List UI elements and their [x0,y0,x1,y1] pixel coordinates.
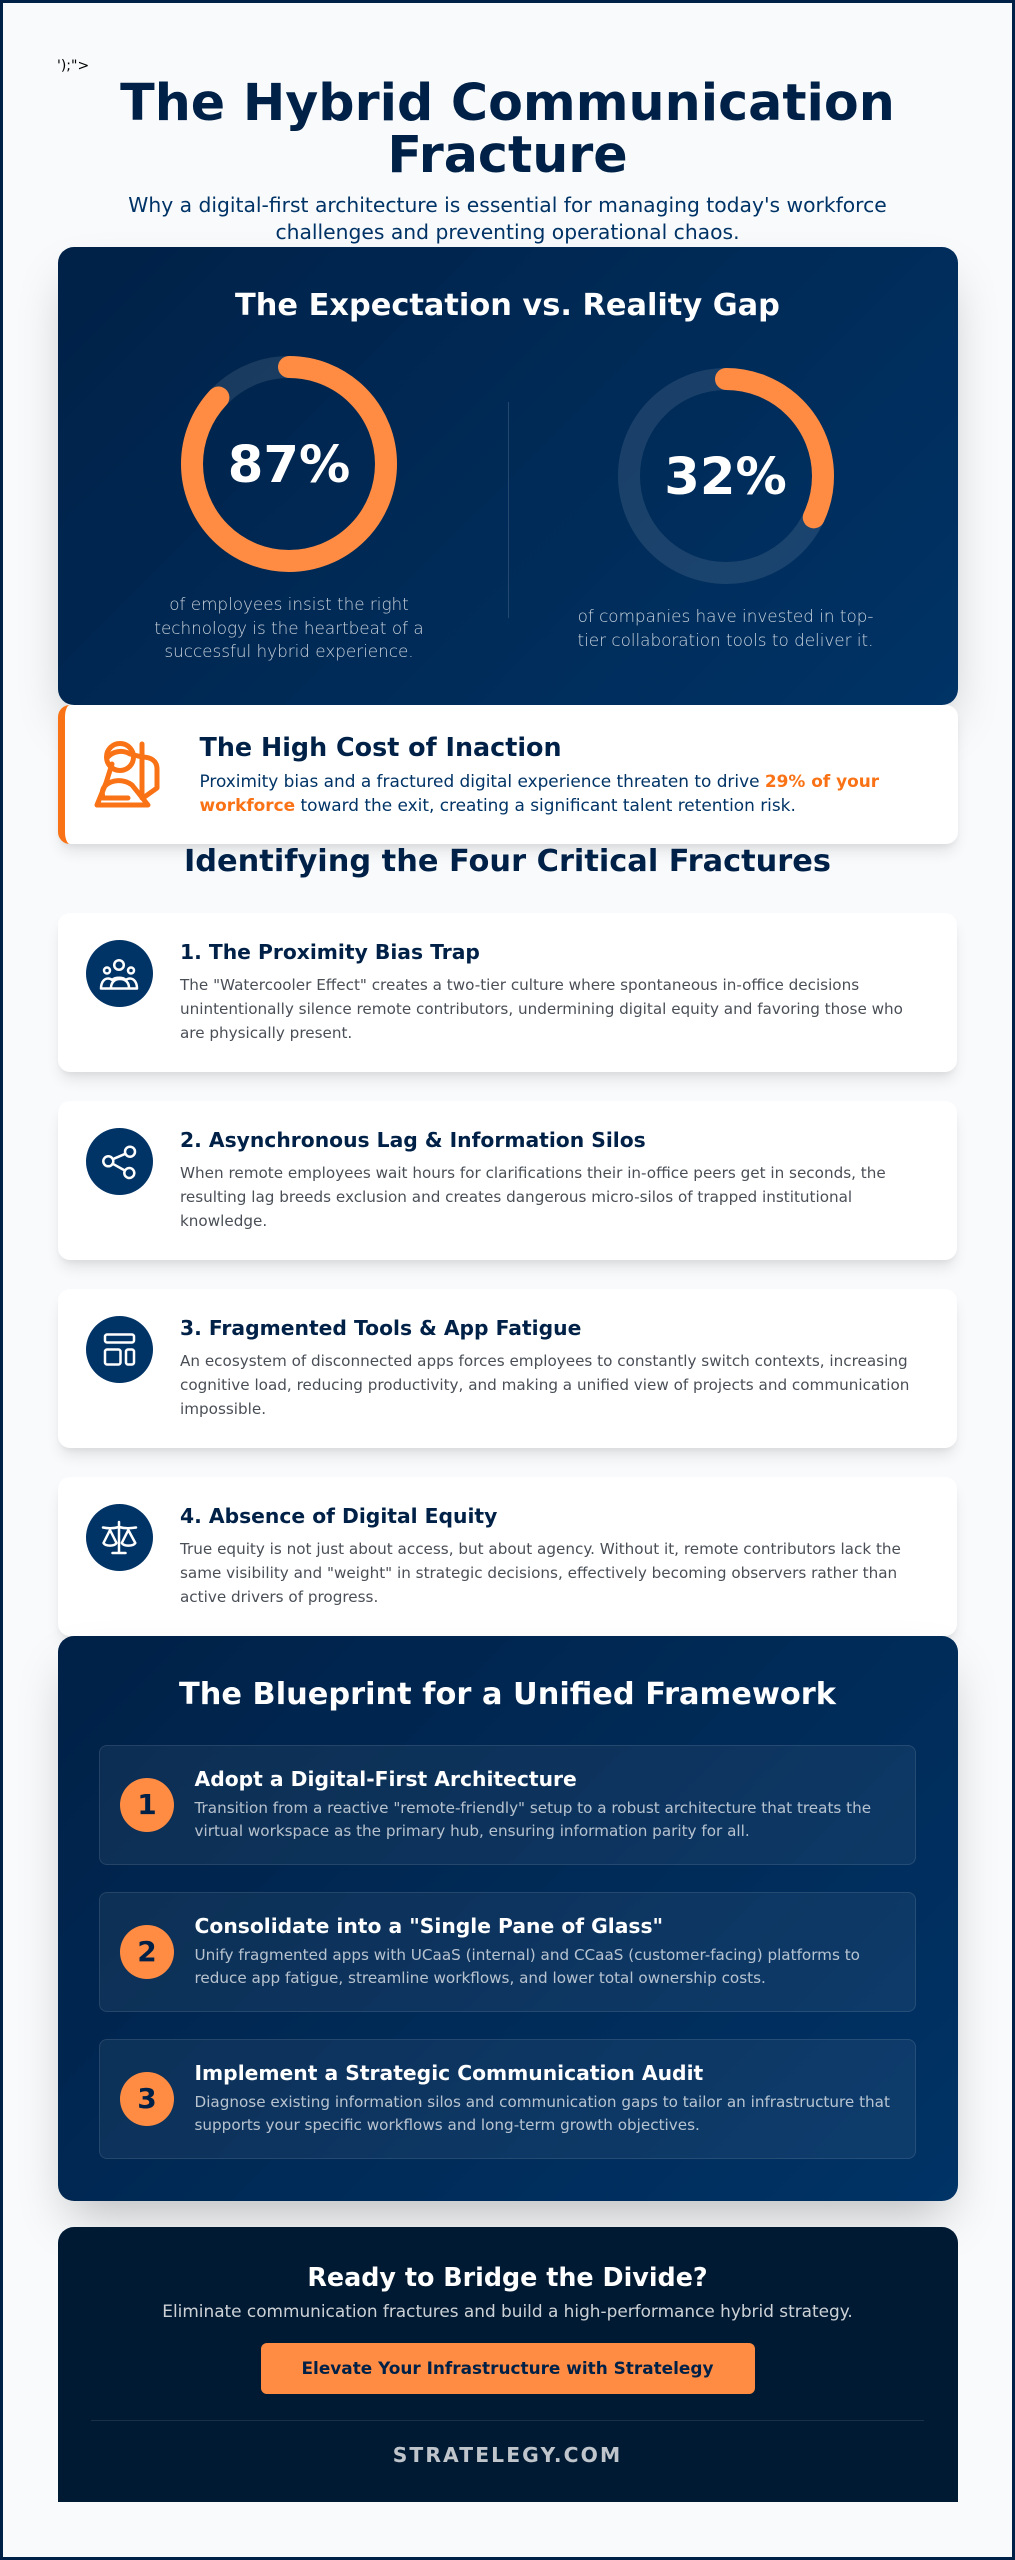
card title: 2. Asynchronous Lag & Information Silos [180,1128,646,1152]
step text: supports your specific workflows and long-term growth objectives. [194,2116,700,2134]
card text: knowledge. [180,1212,267,1230]
divider [91,2420,924,2421]
icon: share nodes [86,1128,153,1195]
number 2 [120,1924,174,1978]
number 3: 3 [137,2082,157,2114]
step text: Transition from a reactive "remote-friendly" setup to a robust architecture that treats the [194,1798,871,1816]
caption: companies: of companies have invested in top- [578,606,873,626]
card text: unintentionally silence remote contributors, undermining digital equity and favoring those who [180,1000,903,1018]
caption: companies: tier collaboration tools to deliver it. [578,630,873,650]
title: Fracture [387,124,628,184]
step 1 [99,1744,916,1864]
step 2 [99,1892,916,2012]
icon: person and document [94,741,160,808]
stat: 87%: 87% [228,435,350,495]
cta button [260,2342,754,2394]
card text: True equity is not just about access, but about agency. Without it, remote contributors lack the [180,1540,901,1558]
card text: The "Watercooler Effect" creates a two-tier culture where spontaneous in-office decisions [180,976,859,994]
body text [200,771,880,815]
card text [180,1352,909,1418]
icon: balance scales [86,1504,153,1571]
card title: 3. Fragmented Tools & App Fatigue [180,1316,581,1340]
icon: layout panels [86,1316,153,1383]
cta heading: Ready to Bridge the Divide? [307,2262,708,2292]
step title: Adopt a Digital-First Architecture [194,1766,577,1790]
panel: call to action [58,2227,958,2502]
step text: Diagnose existing information silos and communication gaps to tailor an infrastructure that [194,2092,890,2110]
card text: cognitive load, reducing productivity, and making a unified view of projects and communication [180,1376,909,1394]
subtitle: Why a digital-first architecture is essential for managing today's workforce [128,193,887,217]
card title: 1. The Proximity Bias Trap [180,940,480,964]
divider [508,402,509,618]
number 1: 1 [137,1788,157,1820]
subtitle [128,193,887,244]
cta text: Eliminate communication fractures and build a high-performance hybrid strategy. [162,2301,853,2321]
step title: Consolidate into a "Single Pane of Glass" [194,1914,663,1938]
cta button: Elevate Your Infrastructure with Stratelegy [302,2358,713,2378]
card: fragmented tools [58,1288,957,1448]
card text [180,1540,901,1606]
panel: blueprint [58,1636,958,2200]
number 2: 2 [137,1934,157,1968]
card text: active drivers of progress. [180,1588,378,1606]
card text: are physically present. [180,1024,352,1042]
footer brand: STRATELEGY.COM [393,2443,622,2467]
card text: same visibility and "weight" in strategic decisions, effectively becoming observers rather than [180,1564,897,1582]
card text: resulting lag breeds exclusion and creates dangerous micro-silos of trapped institutional [180,1188,852,1206]
card text: An ecosystem of disconnected apps forces employees to constantly switch contexts, increasing [180,1352,908,1370]
section heading: Identifying the Four Critical Fractures [184,844,831,879]
caption: companies [578,606,873,650]
panel heading: The Expectation vs. Reality Gap [235,288,780,323]
panel: high cost of inaction [58,705,958,844]
step text: virtual workspace as the primary hub, ensuring information parity for all. [194,1822,750,1840]
stray code fragment: ');"> [57,58,89,74]
step text [194,1798,871,1840]
chart: 87 percent ring [181,356,397,572]
caption: employees: of employees insist the right [169,594,409,614]
subtitle: challenges and preventing operational chaos. [275,220,740,244]
caption: employees [154,594,424,661]
icon: people [86,940,153,1007]
card title: 4. Absence of Digital Equity [180,1504,497,1528]
step 3 [99,2038,916,2158]
step text: reduce app fatigue, streamline workflows, and lower total ownership costs. [194,1969,766,1987]
heading: The High Cost of Inaction [200,732,562,762]
chart: 32 percent ring [618,368,834,584]
number 1 [120,1778,174,1832]
panel heading: The Blueprint for a Unified Framework [179,1677,836,1712]
number 3 [120,2072,174,2126]
caption: employees: successful hybrid experience. [164,641,414,661]
card: asynchronous lag [58,1101,957,1260]
step text [194,2092,890,2134]
body text: Proximity bias and a fractured digital experience threaten to drive 29% of your [200,771,879,791]
step text [194,1946,860,1987]
step text: Unify fragmented apps with UCaaS (internal) and CCaaS (customer-facing) platforms to [194,1946,860,1964]
card text: When remote employees wait hours for clarifications their in-office peers get in seconds, the [180,1164,886,1182]
card text [180,1164,886,1230]
title: The Hybrid Communication [120,73,895,132]
card: digital equity [58,1476,957,1636]
body text: workforce toward the exit, creating a significant talent retention risk. [200,795,796,815]
caption: employees: technology is the heartbeat of a [154,618,424,638]
stat: 32%: 32% [664,447,787,507]
card: proximity bias [58,913,957,1072]
card text: impossible. [180,1400,266,1418]
title [120,73,895,184]
step title: Implement a Strategic Communication Audit [194,2060,703,2084]
panel: expectation vs reality gap [58,247,958,705]
card text [180,976,903,1042]
